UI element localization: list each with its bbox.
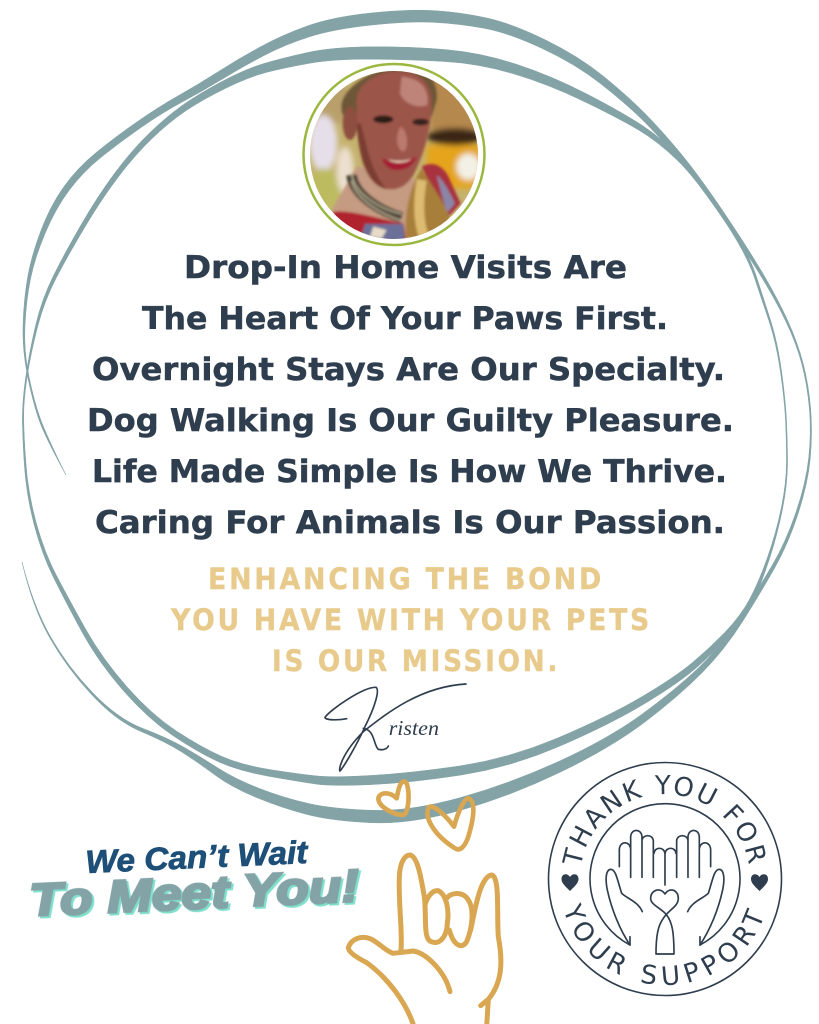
- badge arc text: THANK YOU FOR: [562, 775, 766, 864]
- badge hearts: [562, 874, 768, 891]
- mission statement: YOU HAVE WITH YOUR PETS: [170, 603, 652, 637]
- main heading lines: Drop-In Home Visits Are: [184, 250, 627, 286]
- portrait photo in green ring: [303, 63, 487, 245]
- icon: love sign hand: [348, 855, 501, 1024]
- main heading lines: Dog Walking Is Our Guilty Pleasure.: [87, 403, 734, 439]
- badge arc text: [562, 775, 766, 986]
- hand-drawn spiral circle frame: [22, 10, 812, 823]
- icon: open hands holding heart: [606, 830, 724, 954]
- mission statement: IS OUR MISSION.: [272, 644, 560, 678]
- mission statement: ENHANCING THE BOND: [208, 562, 604, 596]
- face: [357, 71, 432, 189]
- main heading lines: Life Made Simple Is How We Thrive.: [92, 454, 727, 490]
- main heading lines: [87, 250, 734, 541]
- badge: thank you for your support: [548, 762, 782, 996]
- badge arc text: YOUR SUPPORT: [565, 902, 762, 986]
- hair: [341, 67, 437, 127]
- main heading lines: Overnight Stays Are Our Specialty.: [92, 352, 725, 388]
- necklace: [352, 175, 402, 217]
- main heading lines: The Heart Of Your Paws First.: [142, 301, 668, 337]
- mission statement: [170, 562, 652, 678]
- tagline: we can't wait to meet you: [28, 834, 360, 926]
- chest and neck: [332, 167, 418, 237]
- signature: [325, 684, 466, 771]
- blouse: [333, 211, 407, 242]
- ear: [343, 107, 357, 140]
- tagline: we can't wait to meet you: We Can’t Wait: [85, 834, 309, 880]
- tagline: we can't wait to meet you: To Meet You!: [28, 860, 360, 926]
- main heading lines: Caring For Animals Is Our Passion.: [95, 505, 725, 541]
- ponytail: [406, 168, 449, 238]
- icon: two gold hearts: [378, 781, 473, 849]
